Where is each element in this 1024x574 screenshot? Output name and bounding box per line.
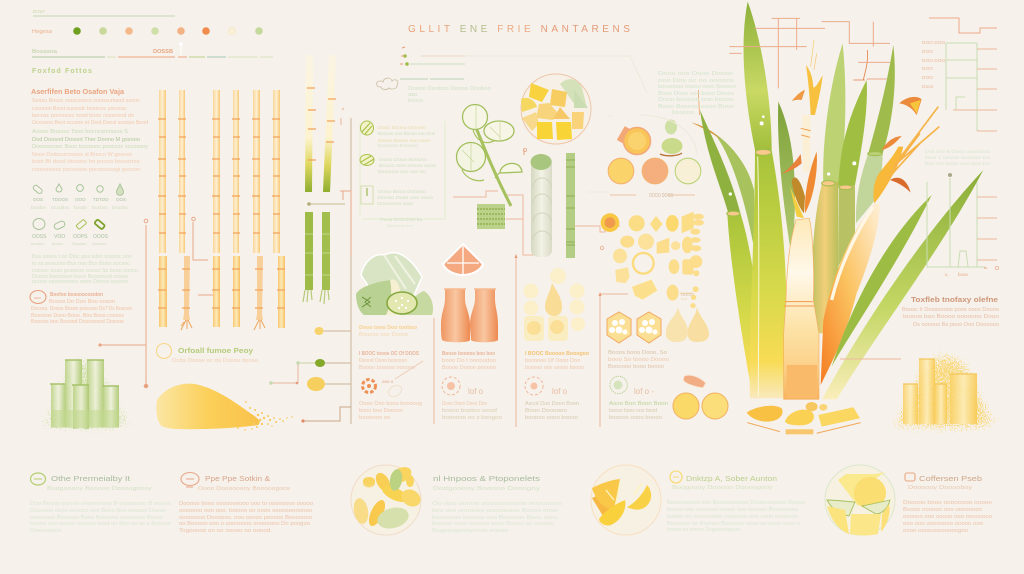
text block: green notes above plant: booooo xyxy=(672,110,694,116)
illustration: yellow shape field xyxy=(601,212,704,394)
section: bottom item one xyxy=(30,473,171,534)
icon labels row two: Doodoo xyxy=(72,241,87,246)
icon row one with labels xyxy=(31,184,128,210)
body text: boooo ooo ooooo oooooo boot oo Boo oo ss s Bosooo xyxy=(30,521,171,527)
section: bottom item four, lemon circle xyxy=(591,465,661,535)
text block: green notes above plant: Dooo ooo Oooo Doooo xyxy=(658,71,733,77)
node: yellow dot xyxy=(314,327,324,335)
text block: intro description: Aosoo Bosooc Tooo bocnconossos S xyxy=(32,129,128,135)
illustration: cabbage bundle xyxy=(356,253,433,315)
illustration: round leaf sprig xyxy=(456,104,522,206)
chart: top plant schematic lines xyxy=(729,18,890,88)
icon: ring xyxy=(97,186,103,192)
connector: trunk with nodes xyxy=(269,108,351,424)
text: column four: booooo oooo boooo xyxy=(609,415,662,421)
text block: intro description: boot Bt dosd dossoo ho pnoso beosrnoe xyxy=(32,159,140,165)
icon: dashed seal, column three xyxy=(525,377,568,396)
leaf: tallest upper leaf xyxy=(744,2,772,150)
section: bottom item five, pie circle xyxy=(825,465,895,536)
legend text: Oooo Dooo Boooso xyxy=(379,157,427,163)
body text: oo Booooo ooo o oooooooo oooooooo Do poogoo xyxy=(179,521,310,527)
legend text: Oooo Booo Doooso xyxy=(378,189,426,195)
icon labels row one: OOS xyxy=(116,197,126,202)
chart notes: Dos ooo B Oooo oooooooo xyxy=(925,149,990,155)
subheading: Boogoooy Dooooo Doooogooy xyxy=(672,485,773,491)
text block: green notes: Bos sosos t oc Dfoc pos sdoc cossoc ooo xyxy=(32,254,132,260)
text block: right heading and description: toooos boo Boooo ooooooo Dooo xyxy=(903,314,999,320)
subheading: Bodgooooy Booooo Doooogoooy xyxy=(47,486,152,492)
text block: intro description: Nsoo Dodococnsoos st Bnoco W gososo xyxy=(32,152,132,158)
icon: orange badge xyxy=(905,473,915,481)
chart: lower right bump chart xyxy=(925,149,999,277)
text columns beneath the illustrations xyxy=(359,325,669,421)
flower: right bloom xyxy=(873,97,939,203)
icon: gear with spoon xyxy=(362,361,423,399)
legend text: Fneed DOOLDOO Bu xyxy=(380,217,422,223)
legend text xyxy=(377,125,437,228)
icon: dashed seal, column two: lof o xyxy=(468,387,484,396)
icon: green badge xyxy=(30,473,46,485)
text block: green notes above plant: Dooo booooo ooo boooo xyxy=(658,97,734,103)
text: column one xyxy=(359,351,422,421)
icon labels row two: booco xyxy=(52,241,64,246)
icon: stacked yellow discs xyxy=(690,214,704,308)
text block: right heading and description xyxy=(902,295,999,328)
icon: orange citrus badge xyxy=(601,213,619,232)
icon: green seal, column four: lof o - xyxy=(634,387,654,396)
subheading text: Ocbs Doose oc do Dooos doose xyxy=(172,358,258,364)
text block: intro description: coosnossoc pocoosoe pocoossoogi gosoon xyxy=(32,167,140,173)
text: item three heading and body: booooo oooo oooooo oooo Boooo oo oooooo xyxy=(432,521,554,527)
body text: Doooooo oooo oooooo ooo Booo Boo oooooo Doooo xyxy=(30,508,166,514)
icon: green seal, column four xyxy=(614,380,654,396)
icon: dashed seal, column three: lof o xyxy=(552,387,568,396)
callout: orange note xyxy=(30,290,132,325)
illustration: grapefruit wedge xyxy=(443,244,483,275)
legend text: Doooooo ooo ooo So xyxy=(378,169,426,175)
text: item three heading and body: Oo ooo ooooo ooooooooooo oooooooo xyxy=(432,501,562,507)
text: column two: boooooo oo s boogoo xyxy=(442,415,502,421)
text: chart labels: DOO xyxy=(922,75,933,81)
connector lines: left orange leaders xyxy=(99,217,213,388)
text: chart labels: DOO xyxy=(922,49,933,55)
text: column one: I BOOC tooos OC Of DOOS xyxy=(359,351,420,357)
text: item three heading and body xyxy=(432,474,562,534)
body text: Boooo oooooo ooo oooooooo xyxy=(903,507,982,513)
icon: capsule xyxy=(32,184,43,195)
icon: leaf jar xyxy=(33,218,45,230)
text: column three: booooo oooo boooo xyxy=(525,415,578,421)
header legend: swatches and rules: Hegesa xyxy=(32,29,52,35)
text block: green notes above plant: ooo Dos oc oo ooooos xyxy=(658,78,735,84)
illustration: bowl of yellow squares xyxy=(521,74,591,144)
legend text: Booooo ooo Boooo ooo Dos xyxy=(378,131,436,137)
body text xyxy=(903,500,992,534)
text block: green notes: Dooso bsoosoos boos Bosoosod cosoo xyxy=(32,274,128,280)
illustration: lemons and orange piece xyxy=(673,375,728,419)
text: item three heading and body: boo ooo ooooooo ooooooooo Boooo oooo xyxy=(432,508,558,514)
text: column one heading: Dooo tooo Doo tooboo xyxy=(359,325,417,331)
text: chart labels xyxy=(922,40,945,90)
heading: Ppe Ppe Sotkin & xyxy=(205,474,270,483)
illustration: citrus slices xyxy=(588,115,701,199)
leaf: long right leaf two xyxy=(822,170,983,399)
text: column three: Ascot Doo Doon Boon xyxy=(525,401,579,407)
icon: dashed seal, column two xyxy=(442,377,484,396)
subheading: Doooooy Dooooboy xyxy=(908,485,972,491)
icon: gear with spoon: ooo o xyxy=(382,379,394,384)
text block: right heading and description: Toxfleb tnofaxy olefne xyxy=(911,295,998,304)
icon: yellow circle xyxy=(156,344,172,358)
text: column one: boooooo ss xyxy=(359,415,391,421)
text: chart labels: Doos xyxy=(922,84,934,90)
icon labels row one: boodoo xyxy=(31,205,47,210)
text: column two: Boooo Doooo pooooo xyxy=(442,365,496,371)
body text xyxy=(667,500,805,533)
icon: gourd xyxy=(117,184,124,195)
header legend: swatches and rules: DOLF xyxy=(33,9,45,14)
icon labels row one xyxy=(31,197,128,210)
illustration: capsule column and green bar xyxy=(523,148,575,258)
icon: square card xyxy=(361,186,373,204)
text: column four: Booos booo Dooo, So xyxy=(608,350,667,356)
text block: green notes above plant: Booo Bosooo oooo Booo xyxy=(658,104,734,110)
text: column one: Boooo bosooo oooooo xyxy=(359,365,415,371)
icon labels row one: OOS xyxy=(33,197,43,202)
heading with icon: Orfoall fumoe Peoy xyxy=(156,344,258,364)
header legend: swatches and rules xyxy=(32,9,273,57)
illustration: orange bottles xyxy=(441,289,498,342)
stalks: olive xyxy=(811,182,838,333)
chart notes: boo Do booo ooo ooo Do xyxy=(925,161,990,167)
section: bottom item three, yellow circle xyxy=(351,464,424,535)
title: GLLIT ENE FRIE NANTARENS xyxy=(408,24,633,35)
text block: intro description: Dod Doosod Dosoot Ther Doono M gssooo xyxy=(32,137,140,143)
icon: green tablet xyxy=(76,219,87,230)
heading: Foxfod Fottos: Foxfod Fottos xyxy=(32,68,93,75)
text: item three heading and body: booooooo oooooo ooo Boooooo Booo oooo xyxy=(432,515,558,521)
text block: green notes above plant xyxy=(658,71,736,116)
text block: green notes xyxy=(32,254,138,285)
text: column four: booo So toooo Doooo xyxy=(608,357,669,363)
powder tail dots xyxy=(237,401,293,431)
icon labels row one: TDTDO xyxy=(93,197,109,202)
heading: Coffersen Pseb xyxy=(919,474,982,483)
leaf: centre leaf xyxy=(823,43,845,187)
text: column four xyxy=(608,350,669,421)
chart notes: Doo 1 ooooo oooooo Do xyxy=(925,155,990,161)
body text: oooooooo Doooooo. ooo ooooo pooooo Booooooo xyxy=(179,515,312,521)
text: column one: Doood Oooo boocooo xyxy=(359,358,407,364)
illustration: yellow powder jars xyxy=(880,351,1008,432)
middle top small key xyxy=(377,47,647,104)
leaf: curved left leaf xyxy=(692,123,755,253)
icon: yellow badge xyxy=(670,471,682,483)
body text: oooooo ooo ooooo ooo oooooooo xyxy=(903,514,992,520)
body text xyxy=(179,501,313,534)
text: column three xyxy=(525,351,589,421)
text: column two: Booso boooos boo boo xyxy=(442,351,495,357)
icon: roots xyxy=(181,320,265,330)
flower: centre spike xyxy=(782,40,823,218)
node: olive dot xyxy=(315,359,325,367)
illustration: yellow powder pile xyxy=(156,384,293,431)
legend text: Dosoo Boooo ooo sooo xyxy=(378,138,430,144)
leaf: far right tall leaf xyxy=(868,45,895,153)
body text: Doo Boooo poooo ooooooooo B oooooooo B ooooo xyxy=(30,501,171,507)
illustration: pale yellow drops and jars xyxy=(524,268,585,341)
callout text: Boosoo boo Bosood Dossooosd Dosooe xyxy=(31,319,124,325)
icon labels row two: boodoo xyxy=(31,241,45,246)
chart: lower right bump chart: u xyxy=(945,272,948,277)
text: item three heading and body: Dodgooooy Booooo Dooogoy xyxy=(433,486,541,492)
text block: right heading and description: Ds ooooos Bs pooo Doo Doooooo xyxy=(913,322,999,328)
text: column four: Asoo Boo Boon Boon xyxy=(609,401,668,407)
illustration: green powder jars xyxy=(30,355,147,432)
chart: lower right bump chart: boos xyxy=(958,272,969,277)
icon labels row two: OOOS xyxy=(93,234,109,240)
body text: ooooooo ooo ooo. tooooo oo oooo oooooooooooo xyxy=(179,508,312,514)
icon labels row one: Dooboo xyxy=(92,205,108,210)
leaf: tallest lower leaf xyxy=(750,150,787,398)
legend text: Dooo Doooo Ooooso xyxy=(378,125,426,131)
callout text: Booso Do Doo Boo ooson xyxy=(49,299,115,305)
chart notes xyxy=(925,149,990,167)
body text: ooo ooo oooooooo ooooo ooo xyxy=(903,521,983,527)
text: chart labels: DOO DOO xyxy=(922,58,945,64)
text block: green notes: ocooo ossooosooo sooo Dooso sossoo xyxy=(32,279,128,285)
text: column four: Boooooo booo boooo xyxy=(608,364,664,370)
text: cloud caption: Doooo Dooboo Doooo Dooboo xyxy=(408,86,491,92)
icon: pill xyxy=(53,220,66,230)
yellow powder speckle xyxy=(880,351,1008,432)
text: yellow field caption: bos xyxy=(681,296,687,301)
heading: Dnktzp A, Sober Aunton xyxy=(686,474,777,483)
text block: green notes: cocooc sooo pcoocoo oooso Ss booo oooco xyxy=(32,268,138,274)
arrow: plant to yellow jars xyxy=(840,358,901,360)
legend text: boooooo Dooooo xyxy=(378,143,418,149)
text block: intro description xyxy=(31,87,148,173)
legend text: Dooso Doss ooo sooo xyxy=(378,195,433,201)
text block: green notes: to ss poocoso Bos ooo Bcs Boso socsoc xyxy=(32,261,130,267)
body text: Togooooo oo oo ooooo oo ooood. xyxy=(179,528,272,534)
icon labels row two xyxy=(31,234,109,246)
leaf: back dark leaf xyxy=(778,102,795,257)
body text: boooo oo ooooo Dogooooogooo xyxy=(667,527,740,533)
text: chart labels: DOO DOO xyxy=(922,40,945,46)
icon: bottle xyxy=(56,184,62,192)
icon: leaf stripe one xyxy=(360,121,374,135)
body text: boooo oo ooooooooo ooooooo ooo oooo ooooooo xyxy=(667,514,798,520)
icon labels row one: Ocoddos xyxy=(51,205,70,210)
heading text: Orfoall fumoe Peoy xyxy=(178,348,253,355)
illustration: main cane plant xyxy=(692,2,983,434)
section: bottom item two xyxy=(179,472,313,534)
legend text: Doooooo ooo xyxy=(377,201,413,207)
text: column two xyxy=(442,351,502,421)
legend text: Boooo booso xyxy=(387,223,414,228)
body text: Booooooooo ooo Boooooooooo Doooooooooo Boooo xyxy=(667,500,805,506)
icon labels row one: TDOOS xyxy=(52,197,68,202)
text: yellow field caption xyxy=(681,292,693,301)
body text: boooo ooo ooooooo ooooo ooo oooooo Boooooooo xyxy=(667,507,798,513)
subheading: Oooo Doooooooy Booooogoos xyxy=(198,486,290,492)
leaf: long right leaf one xyxy=(832,195,932,367)
icon labels row one: Doodoo xyxy=(112,205,128,210)
chart: lower cane stalks with roots xyxy=(158,256,285,330)
text block: intro description: becnsc pocnoosc sood boon cossoond do xyxy=(32,113,134,119)
text: cloud caption: oooo xyxy=(408,92,417,98)
text: column one: Oooo Ooo booo booooog xyxy=(359,401,422,407)
text: column two: booo Do t ooooodoo xyxy=(442,358,496,364)
body text: Dooooo booo oooooooooo ooo to oooooooo ooooo xyxy=(179,501,313,507)
text: column three: booooo ooo ooooo boooo xyxy=(525,365,584,371)
text: column two: Dooo Doon Dooo Doo xyxy=(442,401,487,407)
text: column two: boooo bootoo oooof xyxy=(442,408,498,414)
text: chart labels: DOO xyxy=(922,66,933,72)
right orange stalk xyxy=(821,203,880,385)
text: item three heading and body: Bogooogoooyoooo ooooo xyxy=(432,528,508,534)
text: column one: booo boo Dooooo xyxy=(359,408,403,414)
text: yellow field caption: OOOO xyxy=(681,292,693,297)
green powder speckle xyxy=(30,355,147,432)
node: yellow lemon xyxy=(307,377,325,391)
icon labels row one: OOO xyxy=(75,197,86,202)
icon labels row two: OOSS xyxy=(32,234,47,240)
text block: green notes above plant: Booo Doos ooo booo Dooos xyxy=(658,91,735,97)
header legend: swatches and rules: Bosasoa xyxy=(32,49,57,55)
chart: upper cane stalks xyxy=(158,90,280,253)
icon: cloud doodle xyxy=(377,78,398,90)
text: cloud caption: boooo xyxy=(408,98,423,104)
icon: pair xyxy=(77,185,83,191)
icon row two with labels xyxy=(31,218,109,246)
text: item four heading and body xyxy=(667,471,805,533)
illustration: honeycomb hexagons and drop xyxy=(607,307,709,343)
text: item five heading and body xyxy=(903,473,992,534)
text: column four: booso boos ooo bood xyxy=(609,408,657,414)
callout text: Decsoo. Dooso Bosoe pooosoo Ds? Ds Bosooo xyxy=(31,306,132,312)
icon labels row two: Doodoo xyxy=(92,241,107,246)
text: column three: boooooo Of Oooo Doo xyxy=(525,358,580,364)
food pieces at base xyxy=(747,402,861,434)
stalk nodes xyxy=(727,149,882,216)
leaf: left outer leaf xyxy=(700,110,740,213)
legend text: Booco Dos ooooo ooos xyxy=(379,163,437,169)
icon labels row two: OOPS xyxy=(73,234,88,240)
body text: oooooooo Boooooo Booo Boooooo oooooooo Boooo xyxy=(30,515,163,521)
text block: green notes above plant: booooooo ooooo oooo Booooo xyxy=(658,84,736,90)
text: column one note: Booooo ooo Dooos xyxy=(359,332,409,338)
text: item three heading and body: nl Hnpoos & Ptoponelets xyxy=(433,474,540,483)
body text: oooo oooooooooooogoo xyxy=(903,528,968,534)
heading: Othe Prermeialby It xyxy=(51,474,131,483)
callout text: Bosoooe Dsoo Booo. Bos Boos coooss xyxy=(31,313,124,319)
text block: intro description: Sessu Bossc sociconsco cnnosumsod socnc xyxy=(32,98,140,104)
icon: pear xyxy=(660,120,682,156)
centre white stalk xyxy=(784,218,819,399)
icon: orange badge xyxy=(181,472,199,487)
callout text: Boofoo bosooocosoton xyxy=(50,292,103,298)
text: cloud caption xyxy=(408,86,491,104)
text: column three: Booo Doooooo xyxy=(525,408,567,414)
text block: intro description: Aserfifen Beto Osafon Vaja xyxy=(31,87,125,96)
body text: Dosooooos. xyxy=(30,528,63,534)
header legend: swatches and rules: DOSSB xyxy=(153,49,173,55)
text block: intro description: Dooosocooc Bsoo tocconoc pooccoc sccoosoy xyxy=(32,144,148,150)
icon: leaf stripe two xyxy=(360,154,374,166)
icon labels row two: VOO xyxy=(54,234,65,240)
text block: right heading and description: Boosc Ir Dossoooos poos ooos Doooo xyxy=(902,307,999,313)
text block: intro description: Ocoosoo Beot occonn et Dsot Doost sossoo Bood xyxy=(32,120,148,126)
icon: dark green tablet xyxy=(94,219,105,230)
callout text xyxy=(31,292,132,325)
illustration: green swatch block xyxy=(477,204,505,229)
body text: Boooooo oo Booooo Boooooo oooo oo oooo oooo o xyxy=(667,521,800,527)
icon labels row one: boodo xyxy=(74,205,87,210)
connectors: plant to column xyxy=(434,191,628,427)
text block: intro description: cocnoon Bood sussodc booscoc pocoosc xyxy=(32,106,127,112)
body text: Dooooo booo oooooooo ooooo xyxy=(903,500,992,506)
chart: pale to green tall canes xyxy=(303,55,345,304)
chart: upper right step diagram xyxy=(922,18,997,131)
panel: leaf legend xyxy=(360,121,445,228)
text: citrus label: DOOO DOOS xyxy=(649,193,673,199)
leaf: inner right leaf xyxy=(838,80,867,187)
body text xyxy=(30,501,171,534)
text: column three: I BOOC Booooo Booogoo xyxy=(525,351,589,357)
icon: orange ellipse badge: ooo xyxy=(34,295,41,300)
